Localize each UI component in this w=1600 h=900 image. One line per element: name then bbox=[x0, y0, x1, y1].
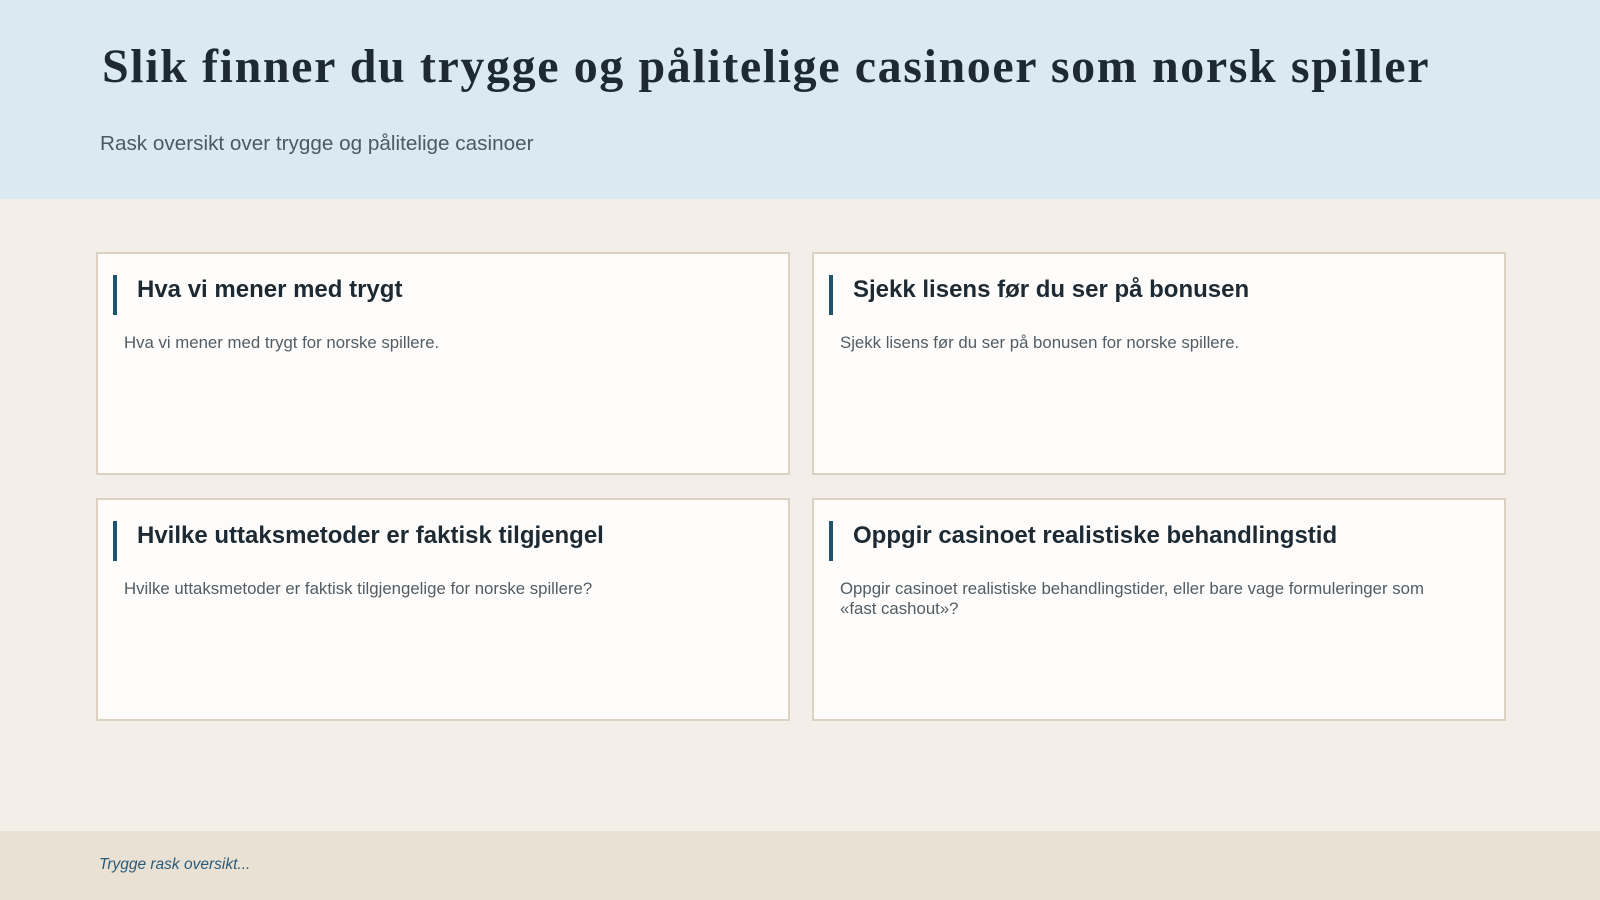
heading: Hva vi mener med trygt bbox=[137, 276, 402, 303]
heading: Oppgir casinoet realistiske behandlingstid bbox=[853, 522, 1337, 549]
text: Sjekk lisens før du ser på bonusen for norske spillere. bbox=[840, 333, 1239, 352]
text bbox=[840, 579, 1424, 618]
text: Oppgir casinoet realistiske behandlingstider, eller bare vage formuleringer som bbox=[840, 579, 1424, 598]
panel: lisens bbox=[812, 252, 1506, 475]
heading: Hvilke uttaksmetoder er faktisk tilgjengel bbox=[137, 522, 604, 549]
text: «fast cashout»? bbox=[840, 599, 958, 618]
header band bbox=[0, 0, 1600, 199]
footer bbox=[0, 831, 1600, 900]
heading: Sjekk lisens før du ser på bonusen bbox=[853, 276, 1249, 303]
accent bar bbox=[829, 275, 833, 315]
panel: behandlingstid bbox=[812, 498, 1506, 721]
text: Hva vi mener med trygt for norske spillere. bbox=[124, 333, 439, 352]
panel: uttak bbox=[96, 498, 790, 721]
panel: trygt bbox=[96, 252, 790, 475]
footer text: Trygge rask oversikt... bbox=[99, 856, 250, 873]
subtitle: Rask oversikt over trygge og pålitelige casinoer bbox=[100, 132, 534, 155]
accent bar bbox=[829, 521, 833, 561]
text: Hvilke uttaksmetoder er faktisk tilgjengelige for norske spillere? bbox=[124, 579, 592, 598]
accent bar bbox=[113, 521, 117, 561]
title: Slik finner du trygge og pålitelige casinoer som norsk spiller bbox=[102, 40, 1430, 93]
accent bar bbox=[113, 275, 117, 315]
